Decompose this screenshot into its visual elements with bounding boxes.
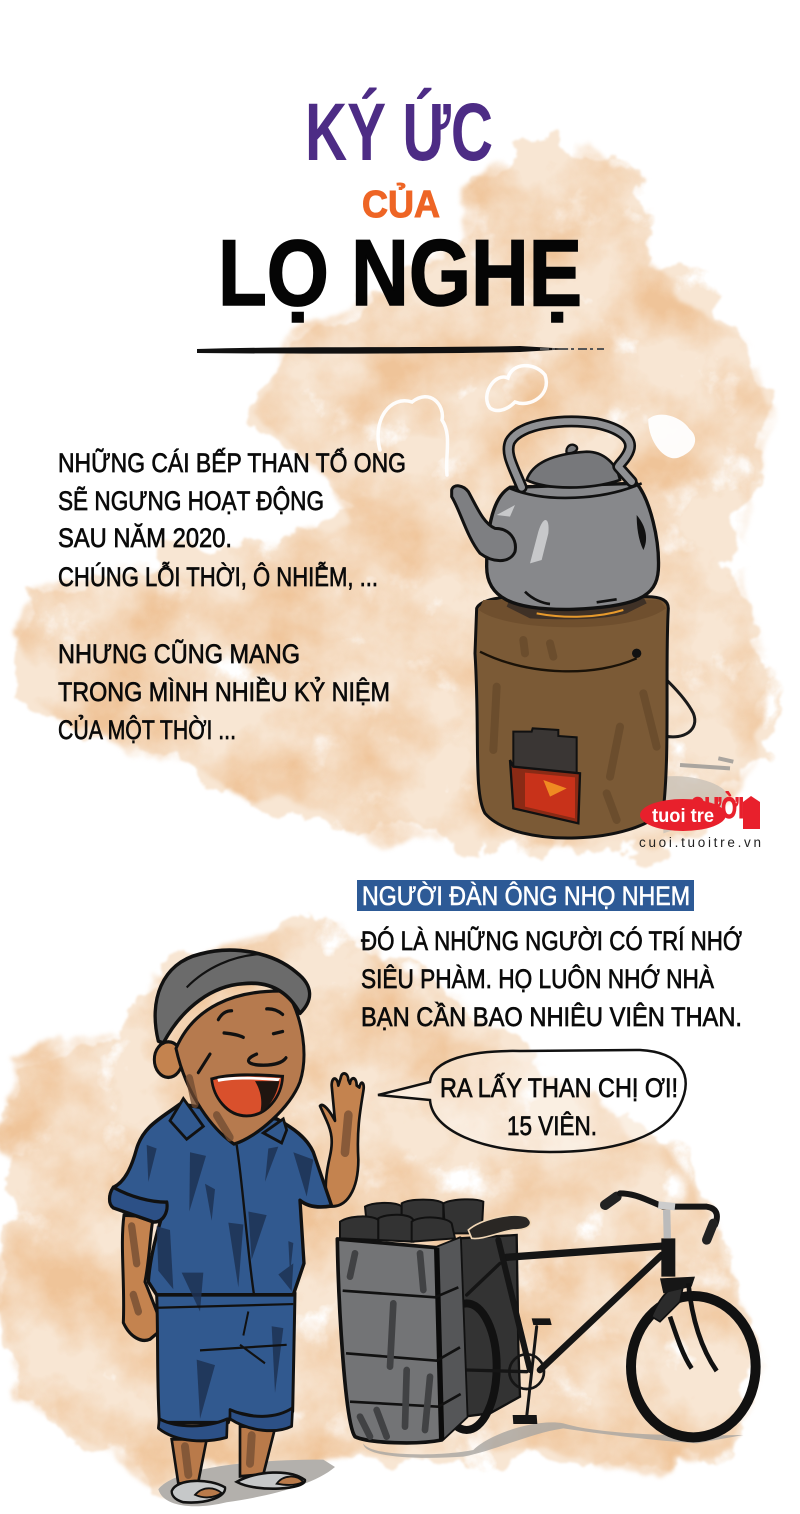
section label: NGƯỜI ĐÀN ÔNG NHỌ NHEM: [362, 880, 690, 911]
kettle spout: [452, 486, 515, 561]
illustration: bicycle with coal sacks: [337, 1193, 756, 1458]
mouth: [212, 1075, 283, 1116]
intro text block: CỦA MỘT THỜI ...: [58, 713, 236, 745]
trouser cuffs: [158, 1408, 293, 1441]
title line: cua: CỦA: [362, 182, 440, 226]
rear wheel: [437, 1303, 497, 1430]
ground shadow: [363, 1422, 743, 1458]
handlebar: [605, 1193, 717, 1240]
left arm: [122, 1215, 163, 1340]
collar: [170, 1099, 287, 1143]
front fork: [652, 1277, 717, 1371]
logo url: cuoi.tuoitre.vn: [639, 835, 761, 850]
bicycle seat: [468, 1215, 531, 1239]
shirt: [110, 1104, 332, 1295]
shirt grime: [147, 1145, 313, 1419]
rear load: [460, 1235, 520, 1417]
watercolor wash: top: [20, 136, 775, 856]
coal briquettes: [340, 1199, 483, 1242]
logo: cuoi tuoi tre: [639, 791, 761, 850]
stove handle wire: [637, 653, 695, 737]
title line: lo nghe: LỌ NGHẸ: [218, 220, 582, 325]
speech bubble: [378, 1050, 686, 1152]
stove body: [475, 596, 668, 838]
logo: cuoi tuoi tre: tuoi tre: [652, 806, 714, 827]
section text block: [361, 925, 742, 1032]
intro text block: [58, 447, 406, 745]
sandals: [172, 1473, 305, 1503]
bicycle frame: [467, 1238, 668, 1417]
intro text block: NHỮNG CÁI BẾP THAN TỔ ONG: [58, 447, 406, 478]
front wheel: [631, 1296, 756, 1437]
intro text block: TRONG MÌNH NHIỀU KỶ NIỆM: [58, 675, 390, 707]
logo: cuoi tuoi tre: CƯỜI: [690, 791, 744, 825]
illustration: kettle on coal stove: [452, 422, 733, 838]
title: [218, 87, 582, 325]
section text block: SIÊU PHÀM. HỌ LUÔN NHỚ NHÀ: [361, 963, 714, 994]
intro text block: CHÚNG LỖI THỜI, Ô NHIỄM, ...: [58, 561, 378, 592]
intro text block: SẼ NGƯNG HOẠT ĐỘNG: [58, 485, 324, 516]
face: [176, 991, 304, 1144]
steam wisps: [378, 366, 693, 475]
intro text block: NHƯNG CŨNG MANG: [58, 638, 300, 669]
section text block: BẠN CẦN BAO NHIÊU VIÊN THAN.: [361, 1001, 742, 1032]
kettle: [487, 483, 659, 609]
intro text block: SAU NĂM 2020.: [58, 523, 232, 553]
eyes, brows and nose: [198, 1009, 286, 1073]
man shadow: [158, 1460, 335, 1506]
raised right arm and hand: [320, 1073, 364, 1206]
cap: [155, 950, 310, 1043]
speech bubble: RA LẤY THAN CHỊ ƠI!: [440, 1072, 678, 1103]
ear: [154, 1042, 182, 1077]
watercolor wash: bottom: [0, 923, 760, 1486]
trousers: [157, 1293, 295, 1423]
pedals: [513, 1318, 552, 1424]
stove door: [513, 728, 577, 773]
legs: [172, 1426, 275, 1484]
brush underline: [197, 346, 604, 354]
speech bubble: 15 VIÊN.: [507, 1110, 597, 1141]
coal sack: [337, 1238, 467, 1443]
kettle handle: [508, 422, 632, 487]
sleeve cuff: [110, 1187, 167, 1222]
title line: ky uc: KÝ ỨC: [305, 87, 493, 178]
illustration: smiling coal seller: [110, 950, 364, 1506]
stove shadow: [663, 776, 727, 833]
